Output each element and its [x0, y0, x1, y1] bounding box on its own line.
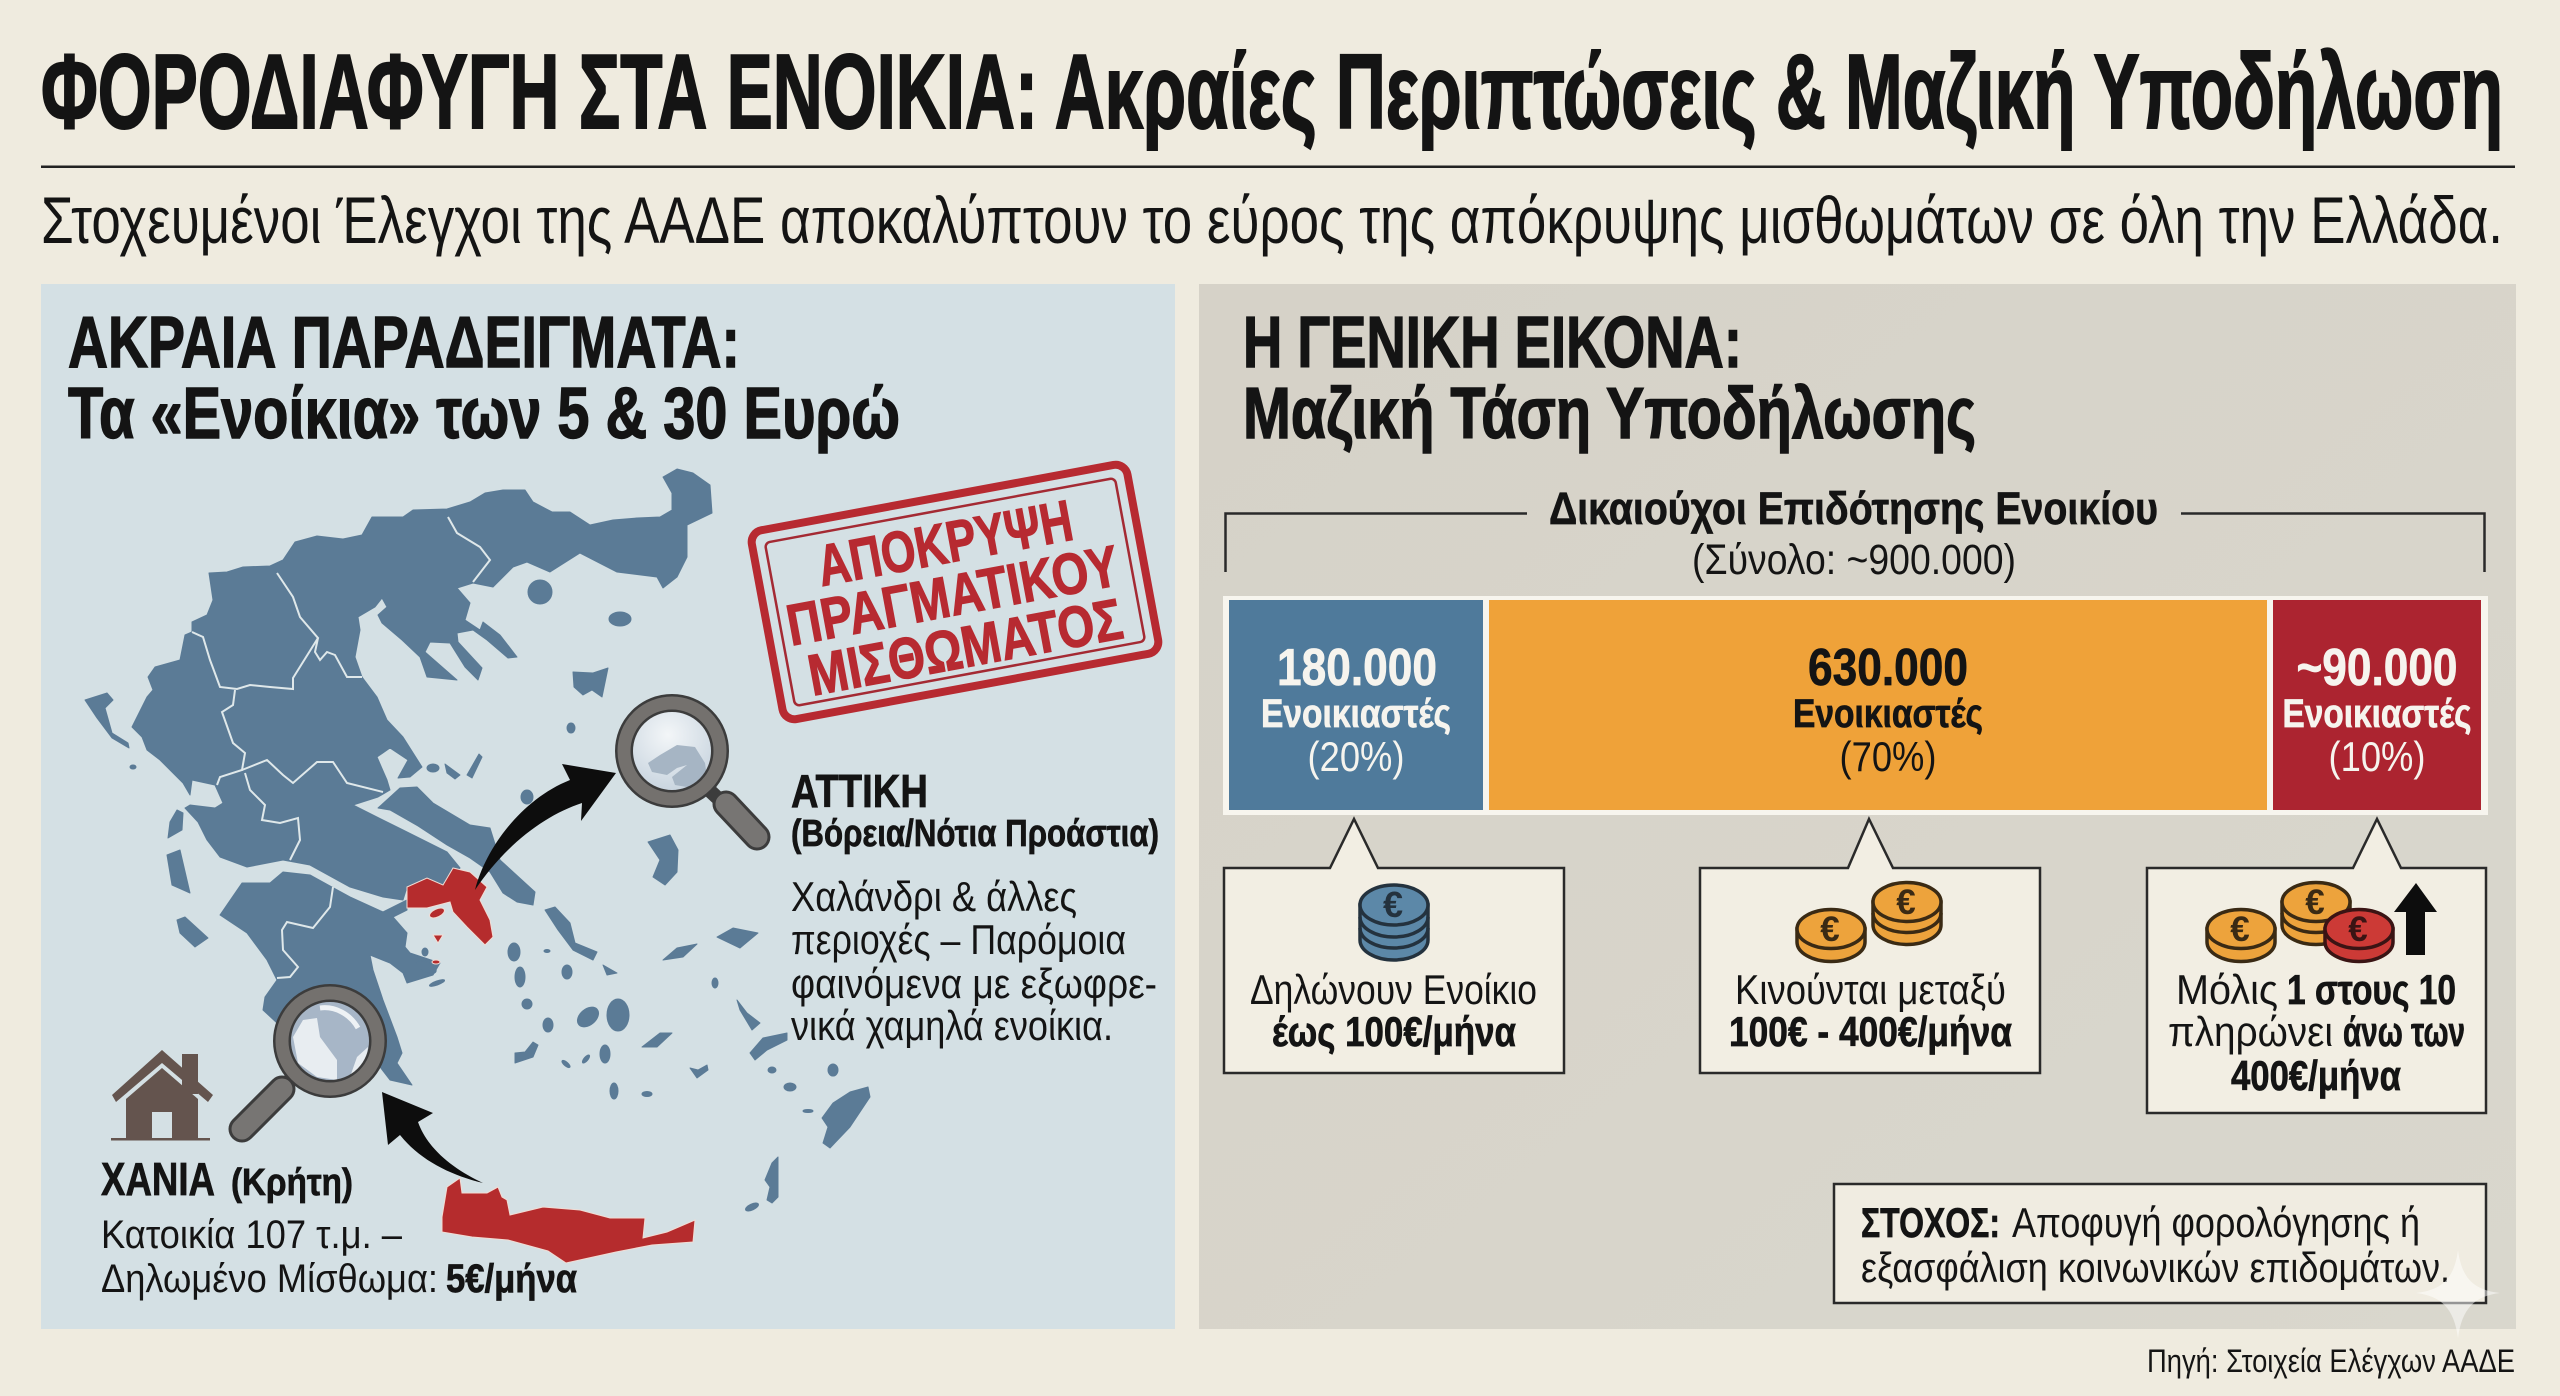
callout: up to 100 euros [1224, 819, 1564, 1073]
text block: Attica: Χαλάνδρι & άλλες [791, 873, 1077, 920]
text block: Attica: ΑΤΤΙΚΗ [791, 765, 928, 817]
callout: goal [1834, 1184, 2486, 1303]
panel heading: overall picture [1243, 303, 1976, 454]
panel heading: extreme examples [68, 303, 900, 454]
text block: Chania: 5€/μήνα [446, 1257, 577, 1301]
callout: over 400 euros: πληρώνει [2168, 1008, 2333, 1055]
icon: orange coin stacks: € [1896, 883, 1916, 922]
callout: 100 to 400 euros: 100€ - 400€/μήνα [1729, 1008, 2012, 1055]
stacked bar: tenants by declared rent [1223, 596, 2488, 815]
icon: orange coin stacks: € [1820, 910, 1840, 949]
text block: Chania: (Κρήτη) [231, 1162, 353, 1204]
bar segment: 70 percent: Ενοικιαστές [1793, 692, 1983, 736]
icon: blue coin stack: € [1383, 884, 1403, 925]
panel heading: extreme examples: Τα «Ενοίκια» των 5 & 30 Ευρώ [68, 374, 900, 454]
text block: Attica: φαινόμενα με εξωφρε- [791, 960, 1157, 1007]
stamp: concealment of actual rent: ΠΡΑΓΜΑΤΙΚΟΥ [782, 533, 1124, 659]
text block: Attica: νικά χαμηλά ενοίκια. [791, 1002, 1113, 1049]
callout: goal: Αποφυγή φορολόγησης ή [2012, 1199, 2420, 1246]
icon: mixed coin stacks and up arrow: € [2230, 910, 2250, 949]
callout: over 400 euros: άνω των [2343, 1008, 2465, 1055]
Crete highlighted [442, 1178, 695, 1263]
panel: overall picture [1199, 284, 2516, 1329]
callout: 100 to 400 euros [1700, 819, 2040, 1073]
stamp: concealment of actual rent [750, 463, 1160, 721]
bar segment: 20 percent [1229, 600, 1483, 810]
icon: mixed coin stacks and up arrow [2207, 882, 2437, 962]
icon: mixed coin stacks and up arrow: € [2348, 910, 2368, 949]
icon: orange coin stacks [1797, 882, 1941, 962]
callout: goal: εξασφάλιση κοινωνικών επιδομάτων. [1861, 1244, 2450, 1291]
icon: house [111, 1050, 213, 1140]
region borders [192, 517, 490, 978]
Attica highlighted [407, 868, 493, 964]
text block: Attica: (Βόρεια/Νότια Προάστια) [791, 813, 1159, 855]
Aegean islands [528, 580, 552, 604]
text block: Chania: ΧΑΝΙΑ [101, 1153, 215, 1205]
callout: over 400 euros [2147, 819, 2486, 1113]
bar segment: 20 percent: (20%) [1308, 733, 1404, 780]
map of Greece [85, 469, 870, 1263]
bracket with total label: Δικαιούχοι Επιδότησης Ενοικίου [1549, 483, 2158, 534]
callout: goal: ΣΤΟΧΟΣ: [1861, 1199, 2000, 1246]
text block: Attica: περιοχές – Παρόμοια [791, 916, 1126, 963]
bar segment: 10 percent: ~90.000 [2296, 639, 2458, 697]
bar segment: 70 percent [1489, 600, 2267, 810]
stamp: concealment of actual rent: ΑΠΟΚΡΥΨΗ [812, 488, 1078, 599]
icon: magnifier Attica [624, 703, 757, 837]
bar segment: 10 percent [2273, 600, 2481, 810]
Ionian islands [85, 693, 129, 748]
callout: over 400 euros: 1 στους 10 [2287, 966, 2456, 1013]
bar segment: 10 percent: Ενοικιαστές [2282, 692, 2472, 736]
panel heading: overall picture: Η ΓΕΝΙΚΗ ΕΙΚΟΝΑ: [1243, 303, 1742, 383]
stamp: concealment of actual rent: ΜΙΣΘΩΜΑΤΟΣ [803, 587, 1128, 708]
bar segment: 70 percent: 630.000 [1808, 639, 1968, 697]
text block: Attica [791, 765, 1159, 1049]
icon: mixed coin stacks and up arrow: € [2305, 883, 2325, 922]
text block: Chania: Κατοικία 107 τ.μ. – [101, 1213, 403, 1257]
icon: blue coin stack [1360, 884, 1428, 960]
bar segment: 20 percent: Ενοικιαστές [1261, 692, 1451, 736]
arrow: Crete to magnifier [382, 1092, 483, 1183]
callout: over 400 euros: 400€/μήνα [2231, 1052, 2401, 1099]
icon: magnifier Chania [242, 993, 378, 1129]
panel heading: overall picture: Μαζική Τάση Υποδήλωσης [1243, 374, 1976, 454]
callout: up to 100 euros: έως 100€/μήνα [1272, 1008, 1516, 1055]
callout: 100 to 400 euros: Κινούνται μεταξύ [1735, 966, 2006, 1013]
bar segment: 70 percent: (70%) [1840, 733, 1936, 780]
panel: extreme examples [41, 284, 1175, 1329]
text block: Chania: Δηλωμένο Μίσθωμα: [101, 1257, 438, 1301]
callout: up to 100 euros: Δηλώνουν Ενοίκιο [1250, 966, 1537, 1013]
bracket with total label [1226, 483, 2484, 584]
callout: over 400 euros: Μόλις [2176, 966, 2278, 1013]
bar segment: 20 percent: 180.000 [1277, 639, 1437, 697]
panel heading: extreme examples: ΑΚΡΑΙΑ ΠΑΡΑΔΕΙΓΜΑΤΑ: [68, 303, 740, 383]
text block: Chania [101, 1153, 577, 1301]
arrow: Attica to magnifier [475, 764, 616, 890]
bracket with total label: (Σύνολο: ~900.000) [1692, 536, 2016, 584]
bar segment: 10 percent: (10%) [2328, 733, 2426, 780]
